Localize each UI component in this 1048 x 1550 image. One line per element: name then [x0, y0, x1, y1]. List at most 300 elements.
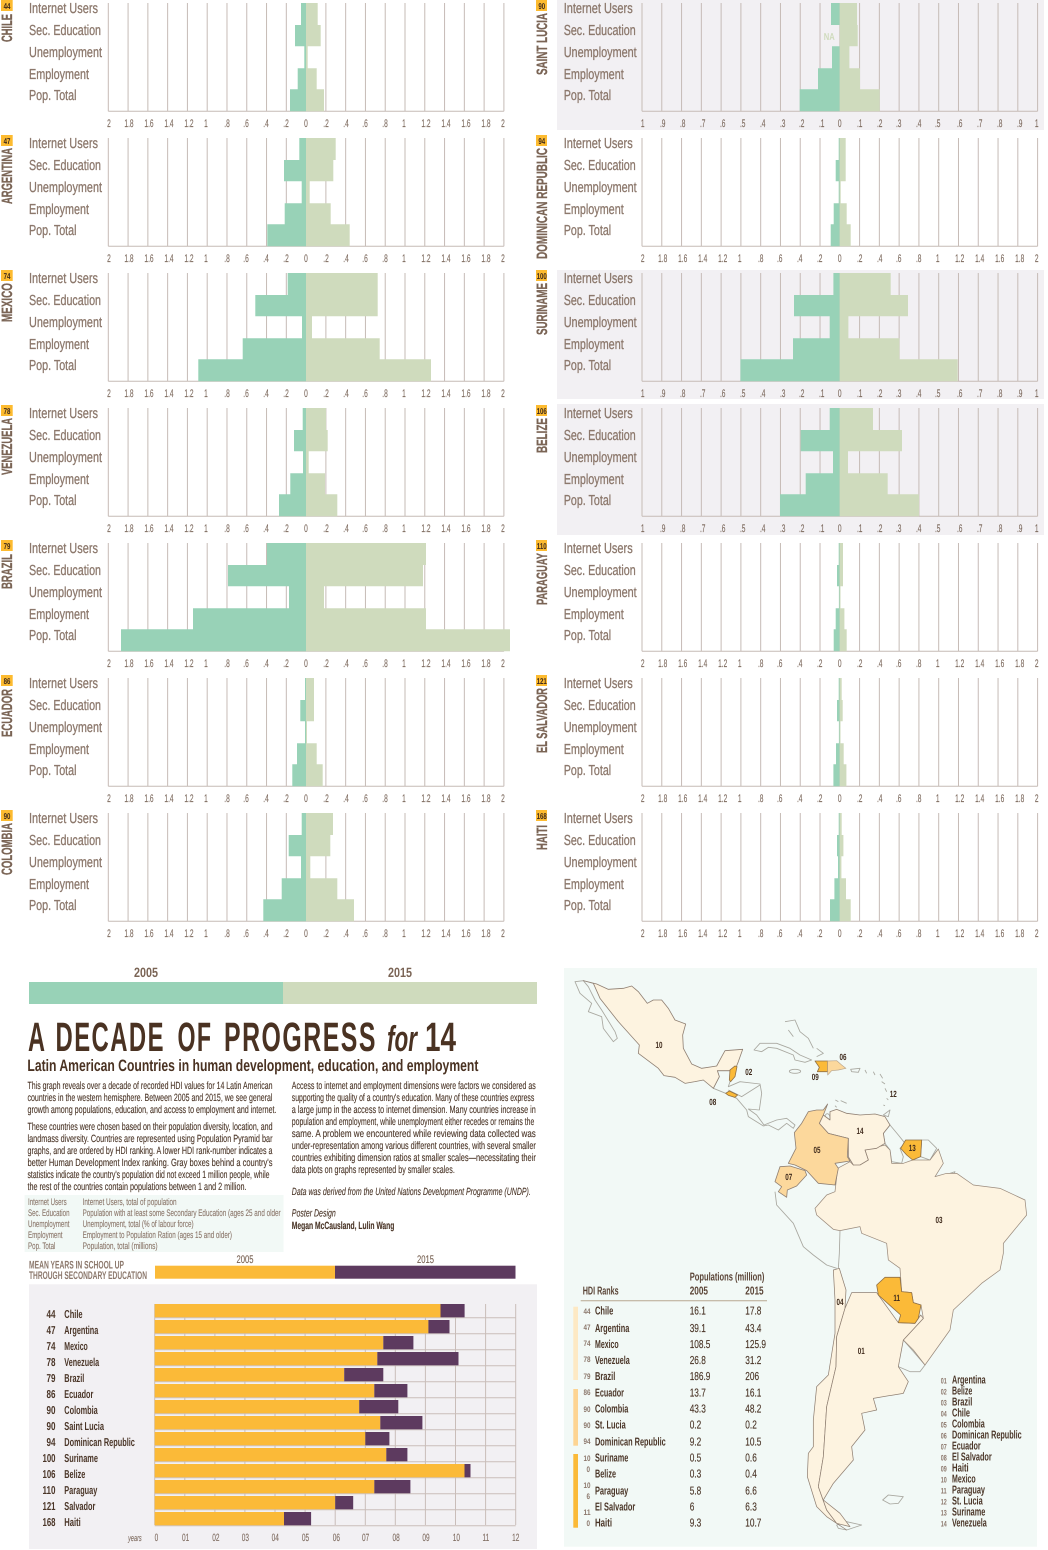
map labels: 02 — [745, 1067, 752, 1077]
chart: Dominican Republic — [534, 135, 1039, 265]
chart: Venezuela: .2 — [323, 523, 329, 535]
chart: Chile: Internet Users — [29, 1, 98, 17]
chart: Paraguay: PARAGUAY — [534, 553, 551, 605]
chart: El Salvador: 1.4 — [698, 793, 707, 805]
chart: Haiti: 1.6 — [995, 928, 1004, 940]
key numbers: 04 — [941, 1410, 947, 1418]
axis: years — [127, 1533, 142, 1543]
chart: Saint Lucia: .9 — [1017, 118, 1022, 130]
chart: El Salvador: 1 — [936, 793, 940, 805]
chart: Dominican Republic: Sec. Education — [564, 158, 636, 174]
chart: Haiti: 1.4 — [975, 928, 984, 940]
chart: Belize: .1 — [857, 523, 862, 535]
key names: Suriname — [952, 1506, 985, 1518]
country names: Colombia — [64, 1405, 98, 1417]
key names: Argentina — [952, 1374, 986, 1386]
chart: Belize: .6 — [720, 523, 725, 535]
population 2005: 43.3 — [690, 1404, 706, 1416]
chart: Colombia: .4 — [263, 928, 269, 940]
chart: Paraguay: 1.8 — [1015, 658, 1024, 670]
chart: Dominican Republic: 1 — [936, 253, 940, 265]
chart: Belize: 1 — [1035, 523, 1039, 535]
chart: Brazil: .4 — [343, 658, 349, 670]
table names: Argentina — [595, 1323, 630, 1335]
key numbers: 01 — [941, 1376, 947, 1386]
chart: Haiti: Unemployment — [564, 855, 637, 871]
population 2005: 0.5 — [690, 1453, 701, 1465]
population 2005: 9.2 — [690, 1437, 701, 1449]
chart: El Salvador: 121 — [537, 676, 547, 686]
chart: Suriname: .6 — [957, 388, 962, 400]
legend: 2005 and 2015 colour bar: 2015 — [388, 965, 412, 980]
rank numbers: 6 — [587, 1492, 590, 1501]
population 2005: 5.8 — [690, 1486, 701, 1498]
chart: Brazil: 79 — [4, 541, 11, 551]
chart: Argentina: .2 — [323, 253, 329, 265]
chart: Venezuela — [0, 405, 505, 535]
rank numbers: 11 — [584, 1508, 591, 1517]
chart: Paraguay: 1 — [936, 658, 940, 670]
chart: El Salvador: 0 — [838, 793, 842, 805]
key names: Mexico — [952, 1474, 976, 1486]
chart: Ecuador: Sec. Education — [29, 698, 101, 714]
chart: Haiti: 1.8 — [658, 928, 667, 940]
chart: Colombia: 1.2 — [184, 928, 194, 940]
chart: Ecuador: .2 — [323, 793, 329, 805]
key numbers: 07 — [941, 1442, 947, 1452]
chart: Mexico: 2 — [501, 388, 505, 400]
chart: Venezuela: 2 — [501, 523, 505, 535]
chart: Colombia: Internet Users — [29, 811, 98, 827]
chart: Brazil: 1.6 — [144, 658, 154, 670]
chart: El Salvador: .8 — [916, 793, 921, 805]
chart: Colombia — [0, 810, 505, 940]
chart: Paraguay: .4 — [877, 658, 882, 670]
land: Argentina — [818, 1293, 923, 1527]
land: Belize — [729, 1066, 737, 1082]
country names — [64, 1309, 135, 1529]
chart: Haiti: 168 — [537, 811, 547, 821]
map labels: 03 — [935, 1215, 943, 1225]
chart: El Salvador: .2 — [817, 793, 822, 805]
chart: Belize: .4 — [760, 523, 765, 535]
panel: dimension definitions: Sec. Education — [28, 1208, 70, 1219]
population 2015: 17.8 — [745, 1306, 761, 1318]
rank tier bars — [573, 1307, 578, 1380]
chart: Haiti: .4 — [877, 928, 882, 940]
chart: Ecuador: 1.8 — [124, 793, 134, 805]
chart: Saint Lucia: .3 — [780, 118, 785, 130]
axis: 12 — [512, 1532, 519, 1544]
table names: Suriname — [595, 1453, 628, 1465]
chart: Colombia: .2 — [323, 928, 329, 940]
chart: Belize: Pop. Total — [564, 493, 611, 509]
country names: Salvador — [64, 1501, 96, 1513]
chart: Brazil: Employment — [29, 607, 89, 623]
chart: Mexico: .4 — [263, 388, 269, 400]
rank numbers: 74 — [584, 1339, 591, 1348]
chart: Belize: .7 — [977, 523, 982, 535]
chart: Chile: .6 — [362, 118, 368, 130]
chart: Argentina: 1.8 — [124, 253, 134, 265]
population 2015: 48.2 — [745, 1404, 761, 1416]
chart: Venezuela: 78 — [4, 406, 11, 416]
country names: Brazil — [64, 1373, 84, 1385]
key numbers: 10 — [941, 1476, 947, 1484]
chart: Dominican Republic: .8 — [758, 253, 763, 265]
population 2015: 6.6 — [745, 1486, 757, 1498]
chart: Chile: 1 — [402, 118, 406, 130]
chart: Dominican Republic: 2 — [1035, 253, 1039, 265]
rank numbers: 78 — [584, 1355, 591, 1364]
title: for — [387, 1018, 418, 1059]
chart: Mexico: 1.8 — [124, 388, 134, 400]
chart: Belize: .3 — [780, 523, 785, 535]
chart: Paraguay: 1.6 — [678, 658, 687, 670]
axis: 0 — [155, 1532, 158, 1544]
axis: 02 — [212, 1532, 220, 1544]
chart: Colombia: 0 — [304, 928, 308, 940]
chart: Haiti: Internet Users — [564, 811, 633, 827]
chart: Ecuador: 1 — [402, 793, 406, 805]
chart: Chile: .8 — [224, 118, 230, 130]
chart: Ecuador: Pop. Total — [29, 763, 76, 779]
axis: 04 — [272, 1532, 279, 1544]
chart: Belize: .5 — [935, 523, 940, 535]
chart: Suriname: .2 — [799, 388, 804, 400]
land: Haiti — [815, 1061, 828, 1072]
chart: Suriname: 1 — [641, 388, 645, 400]
chart: Saint Lucia: .7 — [700, 118, 705, 130]
chart: Saint Lucia: .5 — [740, 118, 745, 130]
chart: Argentina: 0 — [304, 253, 308, 265]
land: Ecuador — [775, 1166, 807, 1197]
chart: Haiti: .6 — [896, 928, 901, 940]
map labels: 11 — [893, 1293, 900, 1303]
chart: Mexico: 74 — [4, 271, 11, 281]
chart: Suriname: .1 — [857, 388, 862, 400]
population 2015: 43.4 — [745, 1323, 762, 1335]
chart: Suriname: .3 — [896, 388, 901, 400]
chart: Mexico: Unemployment — [29, 315, 102, 331]
chart: Dominican Republic: 1 — [738, 253, 742, 265]
table names: Belize — [595, 1469, 616, 1481]
chart: Dominican Republic: 1.6 — [995, 253, 1004, 265]
ranks: 90 — [46, 1405, 56, 1417]
population 2015: 0.4 — [745, 1469, 757, 1481]
map labels — [655, 1040, 943, 1356]
chart: Suriname: Employment — [564, 337, 624, 353]
country names: Saint Lucia — [64, 1421, 104, 1433]
ranks: 110 — [42, 1485, 56, 1497]
rank numbers: 10 — [584, 1481, 591, 1490]
legend: school years colour bar: 2015 — [417, 1254, 434, 1266]
chart: Venezuela: .4 — [343, 523, 349, 535]
chart: Paraguay: Pop. Total — [564, 628, 611, 644]
chart: Ecuador — [0, 675, 505, 805]
chart: El Salvador: Unemployment — [564, 720, 637, 736]
land: Brazil — [815, 1145, 1027, 1365]
chart: Haiti: 1.6 — [678, 928, 687, 940]
map labels: 04 — [836, 1297, 844, 1307]
chart: Belize: .5 — [740, 523, 745, 535]
chart: Chile: 1.6 — [461, 118, 471, 130]
chart: Chile: .6 — [243, 118, 249, 130]
chart: Belize: Unemployment — [564, 450, 637, 466]
chart: Ecuador: .8 — [224, 793, 230, 805]
population 2005: 6 — [690, 1502, 694, 1514]
population 2015: 16.1 — [745, 1388, 761, 1400]
rank numbers: 79 — [584, 1372, 591, 1381]
chart: Argentina: 1.4 — [441, 253, 451, 265]
legend: school years colour bar — [155, 1254, 516, 1279]
chart: Chile: 44 — [4, 1, 11, 11]
text block: intro right column: Megan McCausland, Lulin Wang — [292, 1220, 394, 1232]
chart: El Salvador: 2 — [1035, 793, 1039, 805]
ranks: 74 — [46, 1341, 56, 1353]
chart: Belize: .8 — [997, 523, 1002, 535]
chart: Suriname: Pop. Total — [564, 358, 611, 374]
country names: Paraguay — [64, 1485, 98, 1497]
chart: Ecuador: 1.8 — [481, 793, 491, 805]
table headers: HDI Ranks — [583, 1286, 619, 1298]
chart: Suriname: .5 — [740, 388, 745, 400]
panel: mean years in school bar chart — [29, 1284, 537, 1549]
chart: Mexico: 1.6 — [461, 388, 471, 400]
key names: Haiti — [952, 1462, 969, 1474]
chart: Saint Lucia: NA — [824, 32, 835, 43]
chart: Belize: .9 — [1017, 523, 1022, 535]
chart: Venezuela: 1.2 — [184, 523, 194, 535]
chart: Ecuador: .4 — [263, 793, 269, 805]
panel: dimension definitions: Employment to Population Ration (ages 15 and older) — [83, 1230, 232, 1241]
chart: Haiti: 1.2 — [718, 928, 727, 940]
text block: intro right column: supporting the quality of a country's education. Many of these countries express — [292, 1092, 534, 1104]
table headers: 2015 — [745, 1286, 764, 1298]
chart: Chile: Employment — [29, 67, 89, 83]
chart: Saint Lucia: .3 — [896, 118, 901, 130]
panel: dimension definitions: Internet Users — [28, 1197, 67, 1208]
chart: Suriname: Unemployment — [564, 315, 637, 331]
chart: Chile — [0, 0, 505, 130]
chart: Argentina: 2 — [501, 253, 505, 265]
population 2005: 13.7 — [690, 1388, 706, 1400]
chart: Haiti: HAITI — [534, 825, 551, 850]
chart: Mexico: Internet Users — [29, 271, 98, 287]
chart: Paraguay: .6 — [896, 658, 901, 670]
land: Chile — [807, 1268, 847, 1530]
chart: Dominican Republic: .6 — [777, 253, 782, 265]
chart: Saint Lucia: .5 — [935, 118, 940, 130]
chart: Argentina — [0, 135, 505, 265]
chart: Mexico: .6 — [362, 388, 368, 400]
map labels: 14 — [856, 1126, 864, 1136]
land: Suriname — [901, 1140, 922, 1160]
chart: Dominican Republic: .2 — [857, 253, 862, 265]
chart: Argentina: 1 — [204, 253, 208, 265]
chart: Ecuador: 1.6 — [144, 793, 154, 805]
chart: Brazil: 1.4 — [164, 658, 174, 670]
panel: dimension definitions: Pop. Total — [28, 1241, 55, 1252]
panel: dimension definitions: Internet Users, total of population — [83, 1197, 177, 1208]
chart: Paraguay: 2 — [1035, 658, 1039, 670]
subtitle: Latin American Countries in human development, education, and employment — [27, 1057, 479, 1075]
ranks — [42, 1309, 56, 1529]
chart: Saint Lucia: Employment — [564, 67, 624, 83]
chart: Saint Lucia: .4 — [760, 118, 765, 130]
chart: Argentina: .6 — [362, 253, 368, 265]
chart: Brazil: 1.8 — [481, 658, 491, 670]
chart: Argentina: .2 — [283, 253, 289, 265]
chart: Ecuador: .6 — [362, 793, 368, 805]
chart: Paraguay: .8 — [758, 658, 763, 670]
rank numbers: 0 — [587, 1519, 590, 1528]
ranks: 168 — [42, 1517, 56, 1529]
chart: Paraguay: 110 — [537, 541, 547, 551]
land: Paraguay — [877, 1277, 921, 1323]
chart: Haiti: .2 — [857, 928, 862, 940]
chart: Haiti: 1.4 — [698, 928, 707, 940]
chart: Colombia: Sec. Education — [29, 833, 101, 849]
chart: Dominican Republic: Unemployment — [564, 180, 637, 196]
chart: Dominican Republic: Pop. Total — [564, 223, 611, 239]
population 2005: 16.1 — [690, 1306, 706, 1318]
text block: intro right column: countries exhibiting dimension ratios at smaller scales—necessitating their — [292, 1152, 536, 1164]
chart: Haiti: .2 — [817, 928, 822, 940]
chart: Colombia: 2 — [107, 928, 111, 940]
chart: Chile: 2 — [107, 118, 111, 130]
chart: Ecuador: 1.2 — [421, 793, 431, 805]
chart: Belize: Sec. Education — [564, 428, 636, 444]
text block: intro left column: landmass diversity. Countries are represented using Population Pyramid bar — [28, 1133, 273, 1145]
chart: Saint Lucia: .4 — [916, 118, 921, 130]
chart: Paraguay: 1.6 — [995, 658, 1004, 670]
chart: Saint Lucia: .2 — [799, 118, 804, 130]
chart: Venezuela: .2 — [283, 523, 289, 535]
country names: Ecuador — [64, 1389, 94, 1401]
title: DECADE — [56, 1014, 165, 1060]
chart: Paraguay: Sec. Education — [564, 563, 636, 579]
chart: Brazil: Pop. Total — [29, 628, 76, 644]
table headers: Populations (million) — [690, 1272, 765, 1284]
chart: Belize: .6 — [957, 523, 962, 535]
ranks: 86 — [46, 1389, 56, 1401]
title: A — [28, 1014, 45, 1060]
chart: Paraguay: .4 — [797, 658, 802, 670]
chart: Colombia: 1.4 — [164, 928, 174, 940]
chart: Colombia: 1.8 — [124, 928, 134, 940]
chart: Belize: BELIZE — [534, 418, 551, 453]
chart: El Salvador: 1.4 — [975, 793, 984, 805]
chart: Brazil: 2 — [501, 658, 505, 670]
chart: Brazil: .8 — [382, 658, 388, 670]
map labels: 12 — [890, 1089, 897, 1099]
chart: Mexico: Sec. Education — [29, 293, 101, 309]
chart: Brazil: 1 — [402, 658, 406, 670]
country names: Argentina — [64, 1325, 99, 1337]
chart: Dominican Republic: .8 — [916, 253, 921, 265]
chart: Colombia: 1.2 — [421, 928, 431, 940]
chart: Saint Lucia: Internet Users — [564, 1, 633, 17]
chart: Venezuela: Pop. Total — [29, 493, 76, 509]
chart: Mexico — [0, 270, 505, 400]
chart: Chile: Pop. Total — [29, 88, 76, 104]
panel: map background — [564, 968, 1037, 1547]
ranks: 47 — [46, 1325, 56, 1337]
chart: Mexico: .2 — [323, 388, 329, 400]
chart: Argentina: 2 — [107, 253, 111, 265]
axis: 07 — [362, 1532, 369, 1544]
chart: Chile: .4 — [263, 118, 269, 130]
chart: Mexico: .2 — [283, 388, 289, 400]
chart: Argentina: Unemployment — [29, 180, 102, 196]
chart: Belize: .7 — [700, 523, 705, 535]
chart: Argentina: .6 — [243, 253, 249, 265]
chart: Colombia: 90 — [4, 811, 11, 821]
chart: Venezuela: 1.8 — [481, 523, 491, 535]
key names: St. Lucia — [952, 1496, 983, 1508]
chart: Paraguay: 1.4 — [975, 658, 984, 670]
chart: Colombia: .6 — [243, 928, 249, 940]
chart: El Salvador: EL SALVADOR — [534, 688, 551, 753]
axis: 10 — [453, 1532, 460, 1544]
key numbers: 06 — [941, 1432, 947, 1440]
key numbers: 13 — [941, 1508, 947, 1518]
country names: Suriname — [64, 1453, 98, 1465]
text block: intro left column — [28, 1080, 276, 1193]
chart: Saint Lucia: .6 — [957, 118, 962, 130]
chart: Mexico: .6 — [243, 388, 249, 400]
chart: Ecuador: Unemployment — [29, 720, 102, 736]
chart: Colombia: Employment — [29, 877, 89, 893]
chart: Ecuador: 1.4 — [441, 793, 451, 805]
map labels: 01 — [858, 1346, 865, 1356]
chart: Chile: Sec. Education — [29, 23, 101, 39]
chart: Brazil: 2 — [107, 658, 111, 670]
chart: Suriname: 0 — [838, 388, 842, 400]
chart: Belize: .2 — [799, 523, 804, 535]
chart: El Salvador: .6 — [777, 793, 782, 805]
text block: intro left column: countries in the western hemisphere. Between 2005 and 2015, we see general — [28, 1092, 272, 1104]
table names: Brazil — [595, 1371, 615, 1383]
text block: intro right column: population and employment, while unemployment either recedes or remains the — [292, 1116, 534, 1128]
chart: Belize: .9 — [660, 523, 665, 535]
population 2015: 10.7 — [745, 1518, 761, 1530]
chart: Paraguay: 1 — [738, 658, 742, 670]
chart: Suriname: .7 — [700, 388, 705, 400]
chart: Venezuela: 1.6 — [144, 523, 154, 535]
key numbers: 14 — [941, 1520, 947, 1528]
chart: Dominican Republic: 1.8 — [658, 253, 667, 265]
chart: Dominican Republic: 1.2 — [955, 253, 964, 265]
chart: Venezuela: Employment — [29, 472, 89, 488]
population 2005: 0.2 — [690, 1420, 701, 1432]
chart: Haiti: .8 — [916, 928, 921, 940]
chart: Venezuela: 1.8 — [124, 523, 134, 535]
chart: El Salvador: 1 — [738, 793, 742, 805]
axis: 01 — [182, 1532, 189, 1544]
chart: Paraguay: .8 — [916, 658, 921, 670]
chart: Chile: .2 — [323, 118, 329, 130]
text block: intro left column: better Human Development Index ranking. Gray boxes behind a country's — [28, 1157, 272, 1169]
chart: Argentina: 47 — [4, 136, 11, 146]
chart: Brazil — [0, 540, 510, 670]
chart: Mexico: 1.4 — [164, 388, 174, 400]
chart: El Salvador: Internet Users — [564, 676, 633, 692]
heading: mean years in school: MEAN YEARS IN SCHOOL UP — [29, 1259, 124, 1271]
population 2005 — [690, 1306, 710, 1530]
chart: Mexico: Pop. Total — [29, 358, 76, 374]
